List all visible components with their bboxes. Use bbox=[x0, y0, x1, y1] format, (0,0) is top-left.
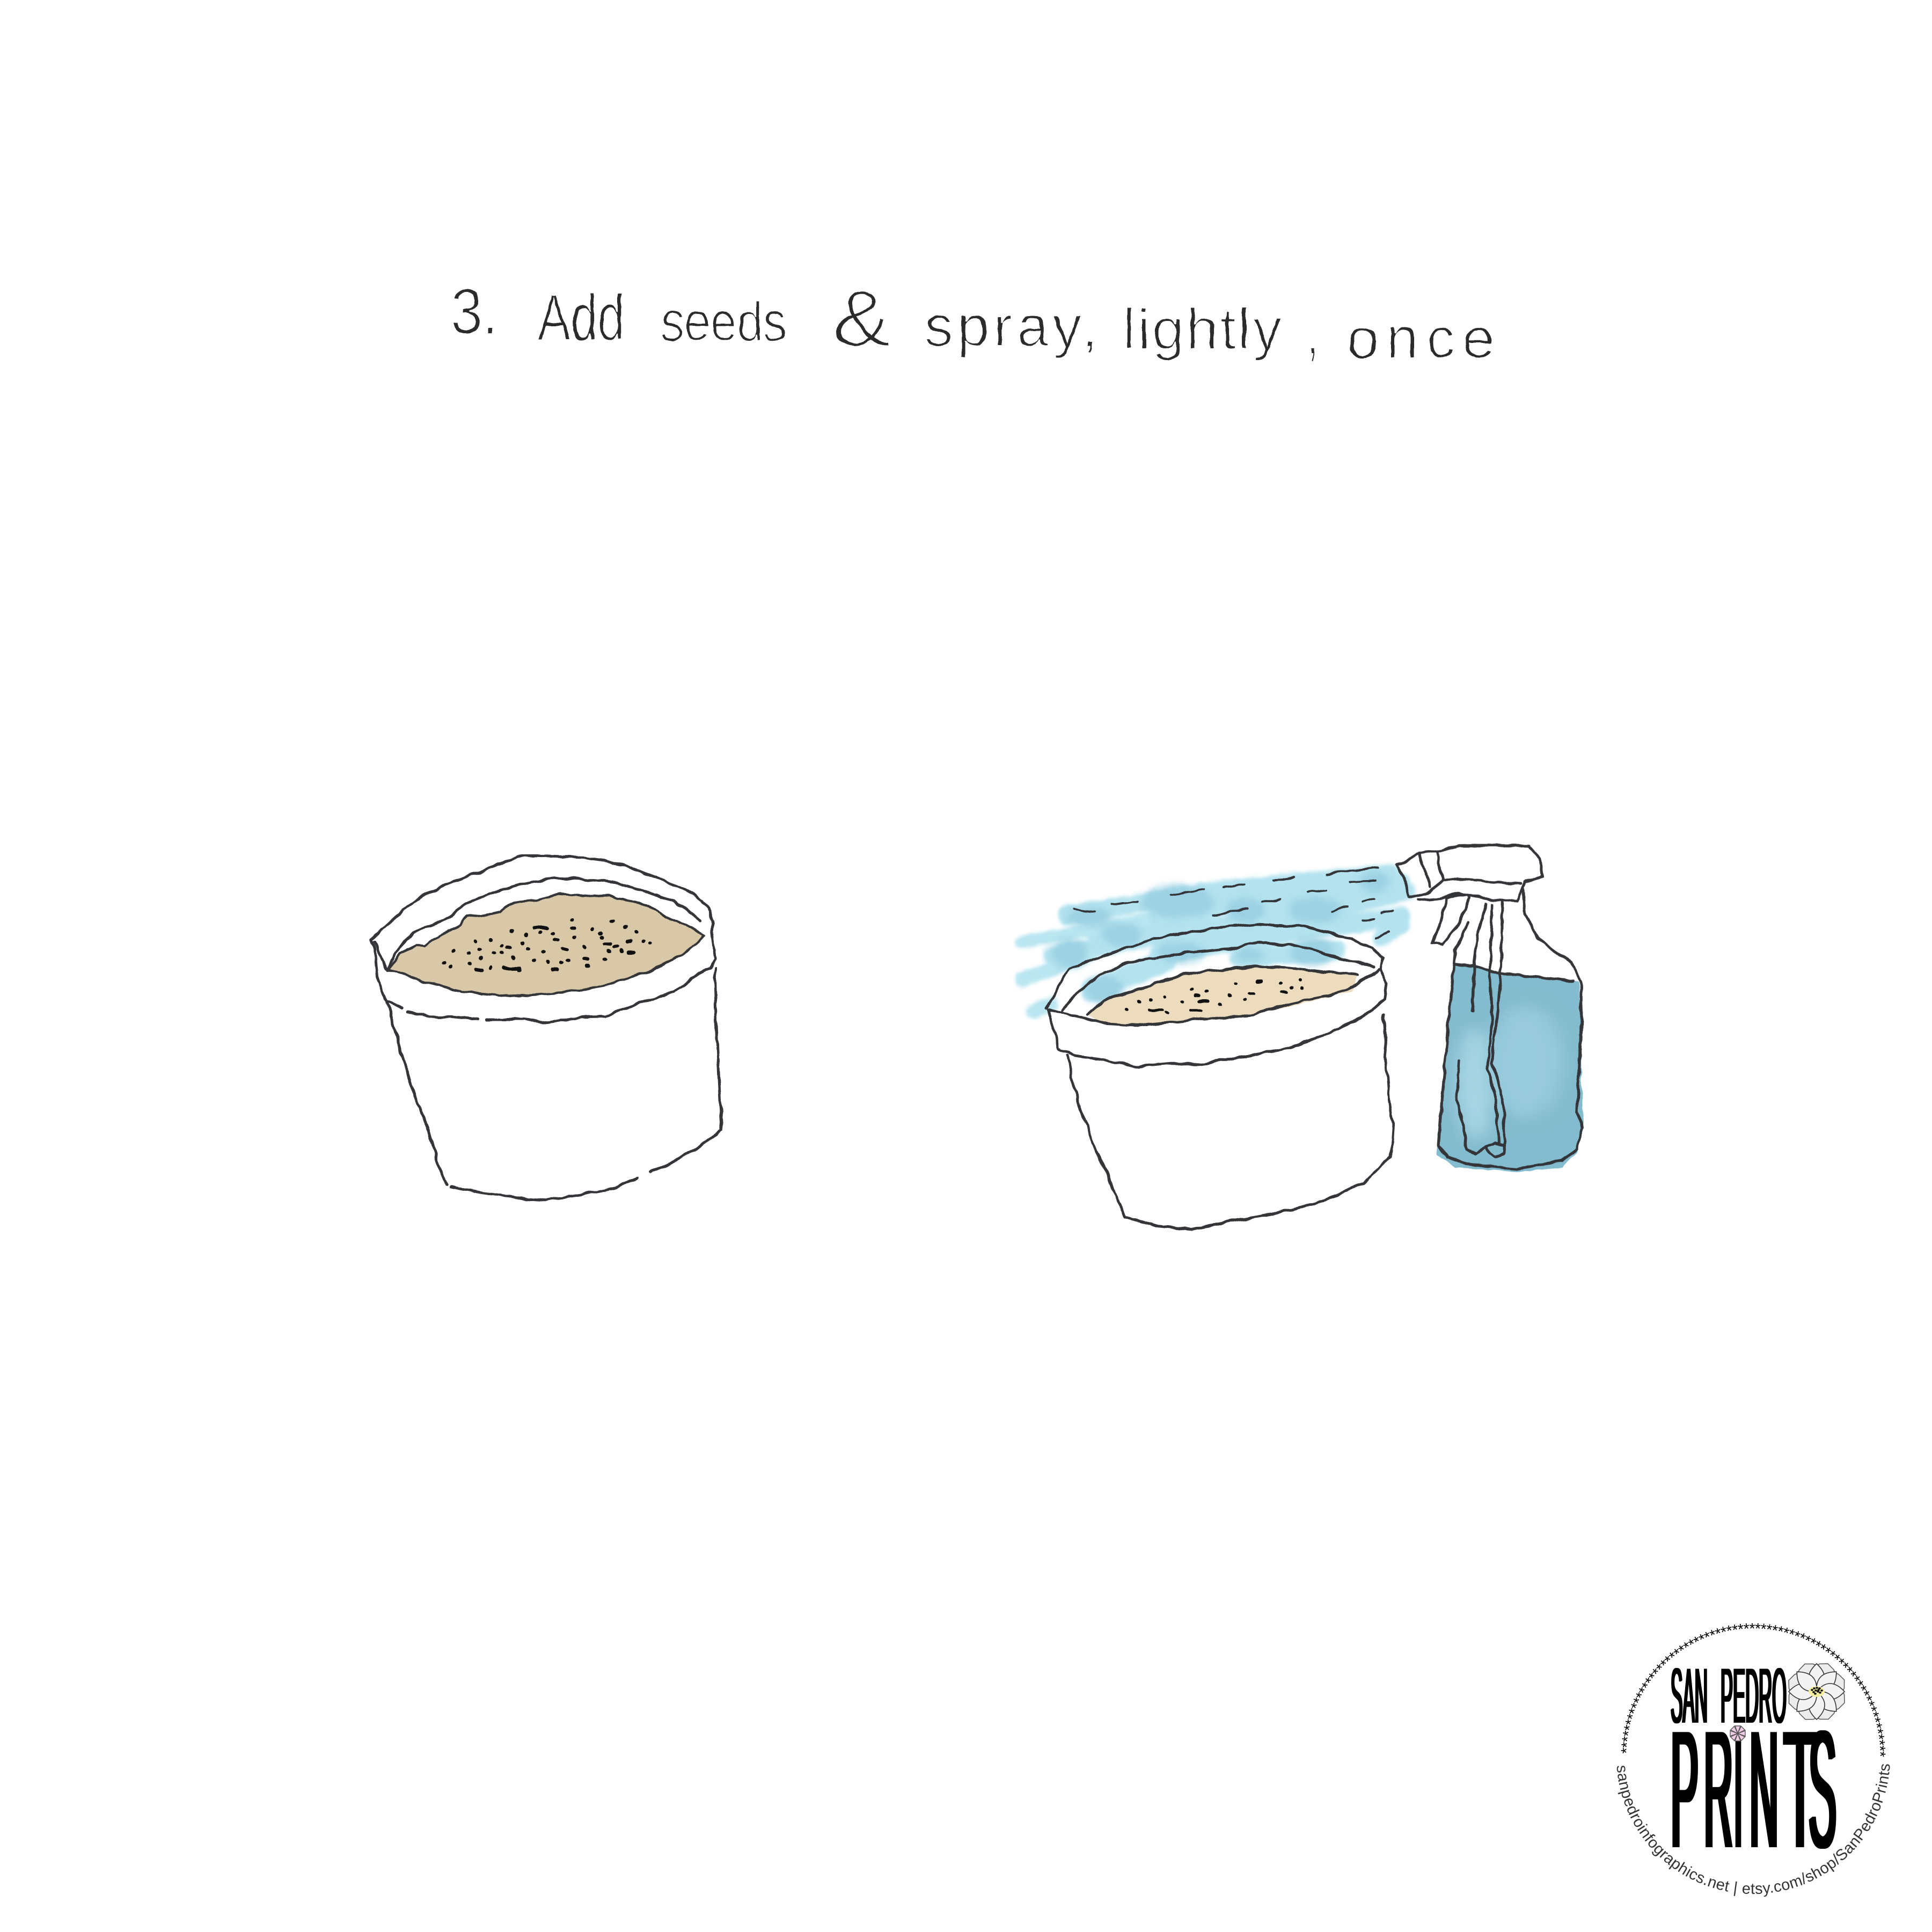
title: & bbox=[832, 273, 891, 363]
spray bottle bbox=[1397, 845, 1591, 1176]
pot outline bbox=[371, 856, 722, 1200]
logo name: San Pedro: SAN bbox=[1671, 1652, 1708, 1739]
soil with seeds bbox=[389, 895, 704, 996]
seeds bbox=[444, 920, 651, 970]
seeds bbox=[1127, 980, 1303, 1012]
title: seeds bbox=[661, 290, 787, 353]
logo name: Prints: R bbox=[1704, 1696, 1733, 1883]
soil with seeds bbox=[1087, 966, 1358, 1026]
panel: pot being sprayed with spray bottle bbox=[1022, 845, 1591, 1229]
title: spray, bbox=[924, 294, 1097, 358]
circular web address: sanpedroinfographics.net | etsy.com/shop/SanPedroPrints bbox=[1616, 1764, 1890, 1897]
infographic canvas bbox=[369, 289, 1890, 1897]
logo name: Prints: I bbox=[1735, 1696, 1742, 1883]
logo name: Prints: N bbox=[1750, 1696, 1779, 1883]
icon: large white flower bbox=[1784, 1659, 1849, 1724]
logo name: Prints: T bbox=[1783, 1696, 1817, 1883]
pot outline bbox=[1046, 924, 1393, 1229]
logo: San Pedro Prints: S bbox=[1809, 1696, 1836, 1883]
icon: small pink flower bbox=[1730, 1726, 1745, 1741]
panel: pot with seeds bbox=[371, 856, 722, 1200]
title bbox=[451, 273, 1495, 370]
title: once bbox=[1346, 305, 1495, 370]
circular asterisk border: ********************************************************************** bbox=[1621, 1623, 1886, 1757]
title: , bbox=[1307, 297, 1318, 368]
title: Add bbox=[538, 281, 625, 354]
soil outline bbox=[389, 895, 704, 996]
title: 3. bbox=[451, 275, 498, 348]
bottle water bbox=[1436, 966, 1584, 1172]
pot body bbox=[1046, 966, 1391, 1229]
logo: San Pedro Prints bbox=[1616, 1623, 1890, 1897]
title: lightly bbox=[1123, 296, 1282, 361]
water mist bbox=[1022, 867, 1406, 1012]
bottle outline and nozzle bbox=[1397, 845, 1583, 1169]
mist dashes bbox=[1073, 867, 1393, 938]
logo name: Prints: P bbox=[1671, 1696, 1699, 1883]
